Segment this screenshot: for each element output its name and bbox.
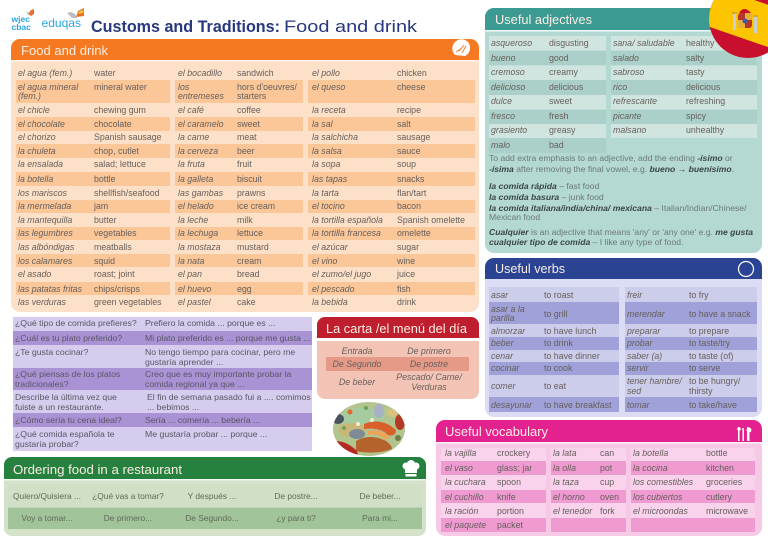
food column 3: salt (397, 119, 411, 129)
adjectives notes: -ísima after removing the final vowel, e.g. bueno → buenísimo. (489, 164, 734, 174)
verbs list: to have dinner (544, 351, 600, 361)
food column 1: chocolate (94, 119, 132, 129)
food column 1: (fem.) (18, 91, 41, 101)
adjectives list: healthy (686, 38, 715, 48)
icon: orange slice (452, 39, 470, 56)
questions: fuiste a un restaurante. (15, 402, 104, 412)
food column 1: jam (93, 201, 108, 211)
adjectives list: unhealthy (686, 125, 725, 135)
food column 3: fish (397, 284, 411, 294)
adjectives list: fresh (549, 111, 569, 121)
vocabulary list: la vajilla (445, 448, 476, 458)
verbs list: saber (a) (627, 351, 662, 361)
verbs list: to have a snack (689, 309, 751, 319)
verbs list: tener hambre/ (627, 376, 683, 386)
ordering phrases: De beber... (360, 491, 400, 501)
vocabulary list: kitchen (706, 463, 734, 473)
food column 1: vegetables (94, 228, 137, 238)
questions: ¿Qué piensas de los platos (15, 369, 121, 379)
food column 2: la fruta (178, 159, 205, 169)
adjectives list: refreshing (686, 96, 725, 106)
verbs list: desayunar (491, 400, 533, 410)
adjectives list: delicioso (491, 82, 525, 92)
vocabulary list: el microondas (633, 506, 688, 516)
food column 3: el pescado (312, 284, 355, 294)
food column 1: shellfish/seafood (94, 188, 160, 198)
verbs list: thirsty (689, 386, 713, 396)
panel: ordering food (4, 457, 426, 536)
questions (15, 318, 137, 449)
food column 2: sweet (237, 119, 261, 129)
food column 3: drink (397, 297, 417, 307)
vocabulary list: los comestibles (633, 477, 694, 487)
food column 3: la tortilla francesa (312, 228, 381, 238)
food column 3: flan/tart (397, 188, 427, 198)
adjectives list: delicious (549, 82, 584, 92)
food column 2: la lechuga (178, 228, 218, 238)
questions: Describe la última vez que (15, 392, 117, 402)
verbs list: freir (627, 290, 643, 300)
vocabulary list: la lata (553, 448, 577, 458)
food column 3: la receta (312, 105, 346, 115)
food column 3: la sal (312, 119, 334, 129)
food column 1: las legumbres (18, 228, 73, 238)
food column 1 (18, 68, 162, 307)
menu items (333, 346, 463, 392)
vocabulary list: la botella (633, 448, 668, 458)
adjectives list: disgusting (549, 38, 589, 48)
vocabulary list: microwave (706, 506, 748, 516)
food column 3: chicken (397, 68, 427, 78)
adjectives list: picante (612, 111, 641, 121)
adjectives list: asqueroso (491, 38, 532, 48)
food column 1: squid (94, 256, 115, 266)
food column 3: omelette (397, 228, 431, 238)
ordering phrases: Y después ... (188, 491, 236, 501)
food column 3: sausage (397, 132, 430, 142)
food column 1: el chorizo (18, 132, 56, 142)
vocabulary list: la taza (553, 477, 579, 487)
verbs list: to serve (689, 363, 720, 373)
food column 1: roast; joint (94, 269, 135, 279)
food column 2: la nata (178, 256, 205, 266)
food column 3: el pollo (312, 68, 340, 78)
ordering phrases: De postre... (274, 491, 318, 501)
adjectives list: sweet (549, 96, 573, 106)
adjectives list: sana/ saludable (613, 38, 675, 48)
menu items: De postre (410, 359, 448, 369)
food column 2: ice cream (237, 201, 275, 211)
food column 1: chop, cutlet (94, 146, 140, 156)
answers: ... bebimos ... (147, 402, 199, 412)
adjectives notes (489, 153, 753, 247)
panel: food and drink: Food and drink (21, 43, 108, 58)
adjectives notes: la comida basura – junk food (489, 192, 604, 202)
food column 3: recipe (397, 105, 421, 115)
verbs list: beber (491, 338, 515, 348)
logo: wjec cbac: cbac (12, 22, 31, 32)
ordering phrases: Quiero/Quisiera ... (13, 491, 81, 501)
table stripes (16, 80, 475, 295)
icon: spanish flag (709, 0, 768, 58)
food column 1: bottle (94, 174, 116, 184)
food column 2: la cerveza (178, 146, 218, 156)
food column 1: chips/crisps (94, 284, 141, 294)
food column 2: el bocadillo (178, 68, 222, 78)
food column 3: wine (396, 256, 415, 266)
heading: useful adjectives (485, 8, 762, 30)
title (91, 17, 418, 36)
icon: cutlery (737, 427, 752, 441)
food column 3: juice (396, 269, 415, 279)
food column 2: la mostaza (178, 242, 221, 252)
verbs list: probar (626, 338, 653, 348)
adjectives notes: la comida rápida – fast food (489, 181, 600, 191)
food column 3: el tocino (312, 201, 345, 211)
food column 3: las tapas (312, 174, 348, 184)
food column 2: el pastel (178, 297, 212, 307)
vocabulary list: fork (600, 506, 615, 516)
menu items: De beber (339, 377, 376, 387)
food column 3: el queso (312, 82, 345, 92)
food column 1: el asado (18, 269, 51, 279)
food column 1: los calamares (18, 256, 73, 266)
adjectives list: creamy (549, 67, 578, 77)
food column 2: milk (237, 215, 253, 225)
food column 3: el azúcar (312, 242, 349, 252)
verbs list: to prepare (689, 326, 729, 336)
food column 2: hors d'oeuvres/ (237, 82, 297, 92)
food column 3: la salsa (312, 146, 342, 156)
ordering phrases: De primero... (104, 513, 152, 523)
verbs list: preparar (626, 326, 661, 336)
questions: ¿Cuál es tu plato preferido? (15, 333, 122, 343)
verbs list: comer (491, 381, 517, 391)
verbs list: merendar (627, 309, 666, 319)
food column 1: salad; lettuce (94, 159, 146, 169)
panel: useful verbs: Useful verbs (495, 261, 565, 276)
food column 2: fruit (237, 159, 252, 169)
verbs list: to take/have (689, 400, 737, 410)
food column 2: el helado (178, 201, 214, 211)
food column 1: meatballs (94, 242, 132, 252)
food column 1: el chicle (18, 105, 50, 115)
answers (145, 318, 311, 439)
vocabulary list: crockery (497, 448, 531, 458)
panel: useful verbs (485, 258, 762, 417)
verbs list: to eat (544, 381, 567, 391)
food column 2: lettuce (237, 228, 263, 238)
adjectives notes: Cualquier is an adjective that means 'any' or 'any one' e.g. me gusta (489, 227, 753, 237)
panel: la carta (317, 317, 479, 399)
menu items: Pescado/ Carne/ (396, 372, 463, 382)
verbs list: cocinar (491, 363, 520, 373)
menu items: Verduras (411, 382, 447, 392)
vocabulary list: packet (497, 520, 523, 530)
menu items: De primero (407, 346, 451, 356)
questions: gustaría probar? (15, 439, 79, 449)
adjectives list: spicy (686, 111, 707, 121)
vocabulary list: la cocina (633, 463, 668, 473)
food column 2: mustard (237, 242, 269, 252)
food column 2: bread (237, 269, 260, 279)
adjectives list: dulce (491, 96, 512, 106)
food column 2: cake (237, 297, 256, 307)
food column 2: los (178, 82, 190, 92)
food column 2: coffee (237, 105, 261, 115)
food column 3: la tortilla española (312, 215, 383, 225)
verbs list: to cook (544, 363, 573, 373)
vocabulary list: groceries (706, 477, 743, 487)
verbs list: to have lunch (544, 326, 596, 336)
vocabulary list: los cubiertos (633, 492, 683, 502)
questions: ¿Cómo sería tu cena ideal? (15, 415, 122, 425)
logo: wjec cbac (10, 9, 34, 32)
icon: chef hat (402, 460, 420, 476)
adjectives list: tasty (686, 67, 705, 77)
adjectives list: bueno (491, 53, 516, 63)
food column 1: green vegetables (94, 297, 162, 307)
food column 1: el agua (fem.) (18, 68, 72, 78)
flag coat of arms (732, 9, 758, 33)
food column 2 (178, 68, 297, 307)
food column 1: el agua mineral (18, 82, 79, 92)
food column 2: entremeses (178, 91, 225, 101)
vocabulary list: can (600, 448, 614, 458)
answers: Prefiero la comida ... porque es ... (145, 318, 275, 328)
food column 2: prawns (237, 188, 266, 198)
food column 2: las gambas (178, 188, 224, 198)
adjectives list: delicious (686, 82, 721, 92)
questions: ¿Te gusta cocinar? (15, 347, 89, 357)
answers: gustaría aprender ... (145, 357, 223, 367)
food column 1: los mariscos (18, 188, 67, 198)
panel: food and drink (11, 39, 479, 312)
panel: la carta: La carta /el menú del día (326, 321, 468, 336)
heading: useful vocabulary (436, 420, 762, 442)
adjectives list: greasy (549, 125, 576, 135)
panel: useful adjectives (485, 8, 762, 253)
adjectives list: refrescante (613, 96, 657, 106)
heading: useful verbs (485, 258, 762, 279)
food column 1: la botella (18, 174, 53, 184)
panel: questions and answers (13, 317, 312, 451)
food column 1: las verduras (18, 297, 67, 307)
photo: paella (333, 402, 405, 456)
icon: circle (738, 262, 754, 276)
ordering phrases: ¿Qué vas a tomar? (92, 491, 164, 501)
food column 2: biscuit (237, 174, 262, 184)
logo: eduqas: eduqas (42, 16, 81, 30)
verbs list: to taste (of) (689, 351, 734, 361)
ordering phrases: ¿y para ti? (276, 513, 316, 523)
food column 3: la sopa (312, 159, 340, 169)
questions: tradicionales? (15, 379, 69, 389)
verbs list: tomar (627, 400, 651, 410)
food column 2: la carne (178, 132, 209, 142)
answers: Creo que es muy importante probar la (145, 369, 291, 379)
food column 3: soup (397, 159, 416, 169)
verbs list: to be hungry/ (689, 376, 741, 386)
verbs list: to roast (544, 290, 574, 300)
food column 2: el pan (178, 269, 202, 279)
adjectives list: fresco (491, 111, 515, 121)
verbs list: to taste/try (689, 338, 731, 348)
verbs list: to have breakfast (544, 400, 612, 410)
answers: comida regional ya que ... (145, 379, 244, 389)
adjectives list: sabroso (613, 67, 644, 77)
food column 3: la salchicha (312, 132, 358, 142)
verbs list: servir (627, 363, 650, 373)
vocabulary list: knife (497, 492, 516, 502)
verbs list: asar a la (491, 304, 525, 314)
menu items: De Segundo (333, 359, 382, 369)
food column 1: la mantequilla (18, 215, 72, 225)
food column 3: el zumo/el jugo (312, 269, 371, 279)
vocabulary list: glass; jar (497, 463, 532, 473)
verbs list: to drink (544, 338, 573, 348)
logo: eduqas (42, 8, 84, 30)
answers: Sería ... comería ... bebería ... (145, 415, 260, 425)
vocabulary list: portion (497, 506, 524, 516)
adjectives list: grasiento (491, 125, 527, 135)
panel: ordering food: Ordering food in a restaurant (13, 462, 182, 477)
panel: useful vocabulary: Useful vocabulary (445, 424, 548, 439)
vocabulary list: la olla (553, 463, 576, 473)
food column 2: meat (237, 132, 257, 142)
answers: Me gustaría probar ... porque ... (145, 429, 267, 439)
logo: wjec cbac: wjec (10, 14, 30, 24)
food column 3: sugar (397, 242, 419, 252)
answers: El fin de semana pasado fui a .... comimos (147, 392, 311, 402)
food column 1: water (93, 68, 116, 78)
vocabulary list: el paquete (445, 520, 486, 530)
title: Food and drink (284, 17, 418, 36)
verbs list: cenar (491, 351, 514, 361)
adjectives notes: la comida italiana/india/china/ mexicana – Italian/Indian/Chinese/ (489, 203, 747, 213)
adjectives notes: Mexican food (489, 212, 540, 222)
food column 3: snacks (397, 174, 425, 184)
food column 2: starters (237, 91, 267, 101)
ordering phrases: De Segundo... (185, 513, 239, 523)
vocabulary list: el cuchillo (445, 492, 484, 502)
ordering phrases: Voy a tomar... (21, 513, 73, 523)
vocabulary list: bottle (706, 448, 728, 458)
adjectives list: malo (491, 140, 510, 150)
vocabulary list: el vaso (445, 463, 473, 473)
questions: ¿Qué comida española te (15, 429, 115, 439)
food column 3 (312, 68, 465, 307)
menu items: Entrada (342, 346, 373, 356)
adjectives list: rico (613, 82, 627, 92)
vocabulary list: cup (600, 477, 614, 487)
food column 2: el café (178, 105, 204, 115)
vocabulary list: cutlery (706, 492, 733, 502)
vocabulary list: el tenedor (553, 506, 593, 516)
food column 1: la chuleta (18, 146, 56, 156)
food column 3: la bebida (312, 297, 348, 307)
food column 3: Spanish omelette (397, 215, 465, 225)
adjectives list: good (549, 53, 569, 63)
food column 3: la tarta (312, 188, 339, 198)
adjectives list: cremoso (491, 67, 525, 77)
verbs list: almorzar (491, 326, 526, 336)
food column 2: beer (237, 146, 255, 156)
food column 3: cheese (397, 82, 425, 92)
ordering phrases: Para mi... (362, 513, 398, 523)
questions: ¿Qué tipo de comida prefieres? (15, 318, 137, 328)
vocabulary list: pot (600, 463, 613, 473)
food column 1: mineral water (94, 82, 147, 92)
verbs list: to fry (689, 290, 709, 300)
food column 2: sandwich (237, 68, 274, 78)
panel: useful vocabulary (436, 420, 762, 536)
adjectives notes: To add extra emphasis to an adjective, add the ending -ísimo or (489, 153, 733, 163)
adjectives list (491, 38, 725, 150)
adjectives list: malsano (613, 125, 646, 135)
food column 3: sauce (397, 146, 421, 156)
food column 2: cream (237, 256, 261, 266)
vocabulary list: spoon (497, 477, 521, 487)
food column 3: el vino (312, 256, 338, 266)
adjectives notes: cualquier tipo de comida – I like any type of food. (489, 237, 683, 247)
panel: useful adjectives: Useful adjectives (495, 12, 592, 27)
answers: Mi plato preferido es ... porque me gusta ... (145, 333, 311, 343)
food column 1: chewing gum (94, 105, 146, 115)
verbs list (490, 290, 751, 410)
adjectives list: salty (686, 53, 705, 63)
adjectives list: salado (613, 53, 639, 63)
heading: la carta (317, 317, 479, 338)
food column 2: el huevo (178, 284, 211, 294)
verbs list: asar (491, 290, 509, 300)
verbs list: parilla (490, 313, 515, 323)
vocabulary list: el horno (553, 492, 585, 502)
food column 1: Spanish sausage (94, 132, 162, 142)
food column 1: el chocolate (18, 119, 65, 129)
food column 1: la mermelada (18, 201, 71, 211)
heading: ordering food (4, 457, 426, 479)
vocabulary list: la cuchara (445, 477, 486, 487)
adjectives list: bad (549, 140, 564, 150)
food column 3: bacon (397, 201, 421, 211)
food column 2: el caramelo (178, 119, 224, 129)
food column 1: la ensalada (18, 159, 63, 169)
food column 1: las albóndigas (18, 242, 75, 252)
title: Customs and Traditions: (91, 18, 280, 36)
vocabulary list (445, 448, 748, 530)
food column 2: egg (237, 284, 252, 294)
verbs list: sed (627, 386, 642, 396)
vocabulary list: oven (600, 492, 619, 502)
verbs list: to grill (544, 309, 568, 319)
heading: food and drink (11, 39, 479, 60)
answers: No tengo tiempo para cocinar, pero me (145, 347, 295, 357)
food column 2: la leche (178, 215, 208, 225)
food column 1: las patatas fritas (18, 284, 83, 294)
vocabulary list: la ración (445, 506, 478, 516)
ordering phrases (13, 491, 400, 523)
food column 1: butter (94, 215, 117, 225)
food column 2: la galleta (178, 174, 213, 184)
